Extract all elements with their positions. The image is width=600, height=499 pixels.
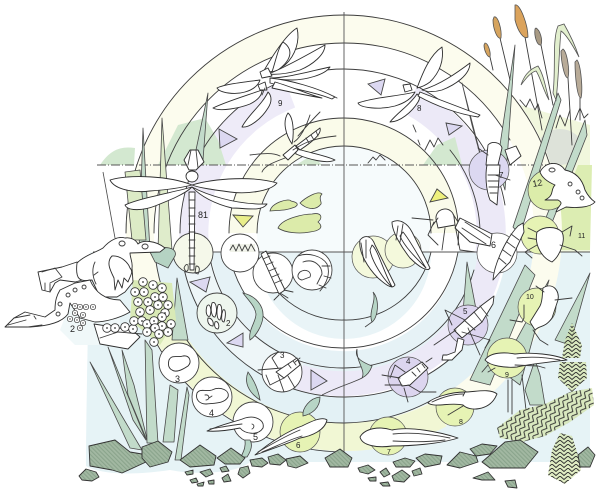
spawn eggs	[67, 278, 175, 346]
frog 11	[525, 226, 585, 262]
emerging dragonfly larva 7	[478, 142, 521, 205]
dragonfly 81, large, left: 81	[198, 210, 208, 220]
reeds lower left	[90, 278, 189, 460]
larva 6	[491, 223, 540, 280]
mosquito larva	[261, 251, 293, 300]
triangles showing direction of the cycle	[190, 79, 462, 390]
dragonfly pair 9: 9	[278, 99, 283, 108]
embryo 3: 3	[175, 374, 180, 384]
frog 12: 12	[532, 177, 543, 189]
tadpole 5	[207, 417, 263, 442]
shrimp-like larva	[298, 254, 331, 291]
froglet 10	[510, 286, 572, 345]
nymph stage 4	[382, 357, 436, 402]
water background	[60, 252, 590, 473]
nymph stage 4: 4	[406, 357, 411, 366]
tadpole 9: 9	[505, 372, 509, 379]
nymph stage 3	[258, 351, 300, 392]
dragonfly 8	[358, 47, 480, 145]
tadpole 8: 8	[459, 419, 463, 426]
tadpole 7	[360, 428, 458, 456]
underwater tints inside rings	[150, 252, 520, 437]
stage circles	[159, 150, 568, 455]
reeds right	[462, 45, 590, 414]
mosquito	[250, 112, 336, 172]
embryo 4	[197, 388, 228, 418]
axes: water surface line, dashed air line, vertical divider	[93, 12, 590, 458]
frog 11: 11	[578, 233, 585, 240]
frog 12	[532, 163, 595, 212]
tadpole 8	[428, 391, 497, 426]
nymph stage 3: 3	[280, 351, 285, 360]
tadpole 9	[482, 353, 567, 379]
nymph stage 5: 5	[463, 307, 468, 316]
dragonfly pair 9	[213, 28, 337, 127]
label 2 on frogs: 2	[70, 324, 75, 334]
dragonfly 8: 8	[417, 104, 422, 113]
embryo 3	[168, 356, 190, 384]
nymph stage 5	[434, 296, 494, 360]
feathery water plants	[497, 323, 594, 484]
froglet 10: 10	[526, 294, 534, 301]
tadpole 6: 6	[296, 441, 301, 450]
tadpole 6	[255, 419, 327, 455]
tadpole 5: 5	[253, 432, 258, 442]
pond bank and land tint	[472, 105, 592, 252]
adult insects at the surface, centre right	[360, 209, 492, 287]
tadpole 7: 7	[387, 449, 391, 456]
frogs with spawn, lower left	[5, 237, 176, 349]
larva 6: 6	[491, 240, 496, 250]
ring outlines	[126, 15, 550, 452]
embryo 4: 4	[209, 408, 214, 418]
reeds upper left	[103, 93, 208, 250]
grass patches above the water line	[100, 118, 462, 165]
egg cluster stage 2: 2	[226, 319, 231, 328]
water weed strands	[241, 292, 377, 457]
mosquito pupae on surface	[230, 244, 255, 252]
rocks	[79, 440, 595, 488]
dragonfly 81, large, left	[110, 150, 277, 274]
concentric life-cycle rings	[140, 29, 548, 437]
floating leaves	[270, 193, 322, 233]
emerging dragonfly larva 7: 7	[499, 171, 504, 180]
cattails	[484, 5, 588, 145]
small grass marks on the water line	[368, 138, 443, 163]
egg cluster stage 2	[206, 302, 231, 329]
